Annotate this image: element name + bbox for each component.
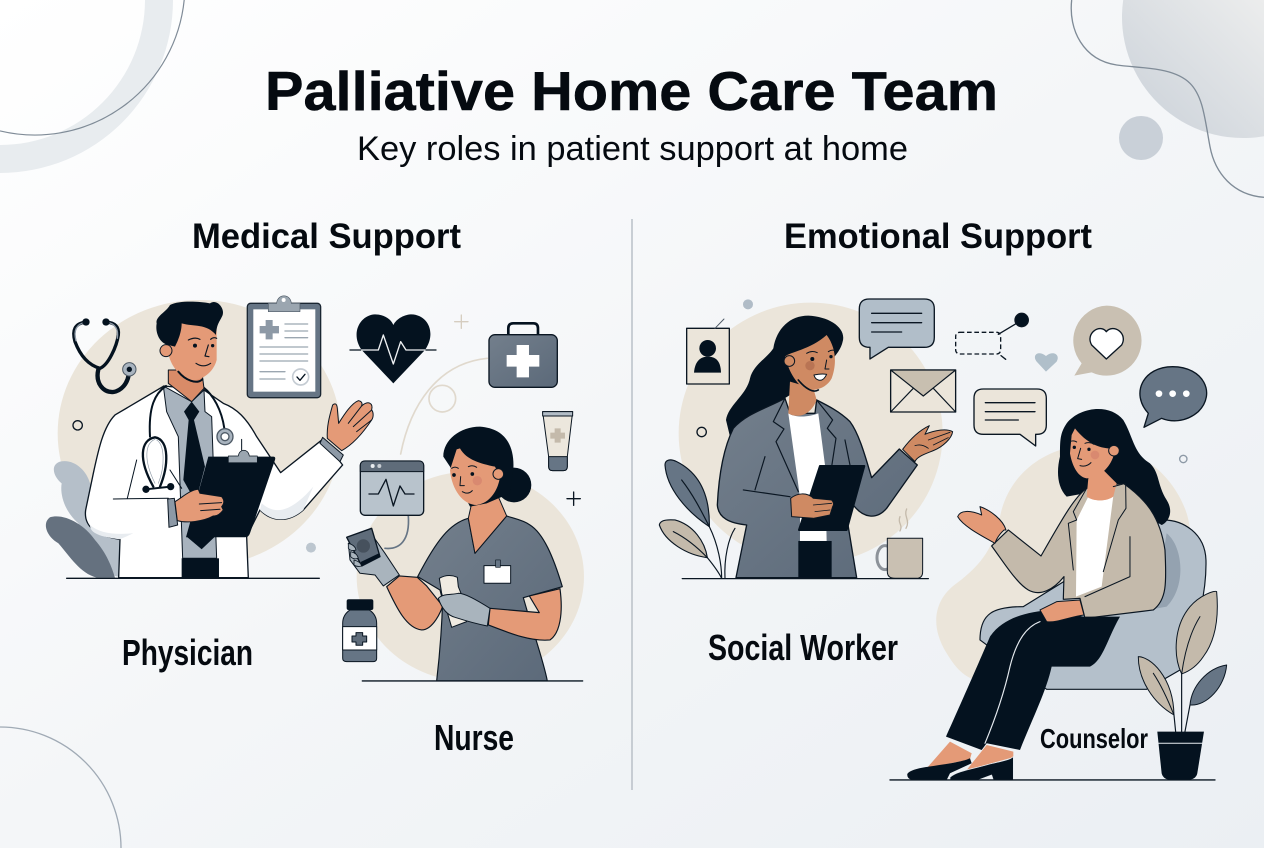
social worker: hands — [791, 426, 953, 518]
physician: held clipboard — [186, 450, 275, 537]
counselor: trousers — [946, 610, 1120, 750]
icon: coffee mug — [877, 509, 923, 578]
illustration: physician — [46, 296, 373, 578]
icon: medical kit — [489, 323, 557, 387]
icon: plant leaves — [46, 461, 120, 578]
physician: lab coat — [85, 386, 343, 578]
counselor: head — [1070, 428, 1119, 478]
social worker: face — [784, 335, 835, 391]
subtitle: Key roles in patient support at home — [357, 130, 908, 168]
nurse: head — [443, 427, 531, 553]
nurse: arms — [387, 576, 561, 640]
heading: medical support: Medical Support — [192, 217, 461, 256]
icon: stethoscope — [74, 318, 136, 392]
icon: heart speech bubble — [1073, 306, 1142, 376]
icon: potted plant — [1138, 591, 1227, 780]
icon: medical chart clipboard — [247, 296, 321, 398]
nurse: gloved hand with pill bottle — [438, 576, 490, 627]
floating icons: emotional support — [956, 306, 1207, 446]
icon: heart monitor — [360, 461, 424, 548]
illustration: nurse — [343, 314, 584, 682]
physician: raised hand and cuff — [320, 401, 373, 462]
icon: note speech bubble — [974, 389, 1046, 446]
label: physician: Physician — [122, 632, 253, 673]
divider — [631, 219, 633, 790]
counselor: jacket — [992, 483, 1166, 618]
illustration: social worker — [659, 299, 956, 579]
counselor: hand on knee — [1040, 600, 1084, 622]
label: social worker: Social Worker — [708, 627, 898, 668]
counselor: shirt and neck — [1068, 470, 1130, 597]
heading: emotional support: Emotional Support — [784, 217, 1092, 256]
nurse: gloved hand with device — [347, 528, 399, 586]
icon: portrait card — [687, 319, 729, 384]
icon: message bubble — [859, 299, 934, 359]
physician: head — [156, 302, 223, 402]
icon: cream tube — [543, 412, 573, 471]
label: counselor: Counselor — [1040, 723, 1148, 754]
icon: ellipsis speech bubble — [1140, 367, 1207, 427]
icon: heart with pulse — [350, 314, 436, 383]
physician: neck stethoscope — [113, 386, 242, 499]
icon: plant — [659, 460, 735, 578]
physician: hand and cuff on clipboard — [168, 489, 224, 527]
social worker: jacket — [717, 398, 917, 578]
counselor: hair — [1058, 409, 1170, 525]
counselor: raised hand — [958, 507, 1006, 543]
title: Palliative Home Care Team — [265, 60, 998, 122]
nurse: scrubs — [418, 516, 562, 681]
social worker: hair — [726, 316, 843, 437]
social worker: neck and lapels — [743, 382, 850, 497]
illustration: counselor — [890, 409, 1227, 780]
physician: shirt — [163, 386, 217, 558]
social worker: tablet — [799, 466, 864, 530]
icon: small heart — [1035, 353, 1058, 372]
social worker: shirt and trousers — [788, 413, 832, 578]
counselor: armchair — [980, 520, 1206, 689]
nurse: name badge — [484, 560, 511, 583]
icon: envelope — [891, 370, 956, 412]
label: nurse: Nurse — [434, 717, 514, 758]
counselor: feet and shoes — [907, 742, 1013, 780]
physician: tie — [183, 402, 215, 549]
icon: medicine bottle — [343, 599, 377, 662]
icon: dashed connector node — [956, 313, 1028, 359]
